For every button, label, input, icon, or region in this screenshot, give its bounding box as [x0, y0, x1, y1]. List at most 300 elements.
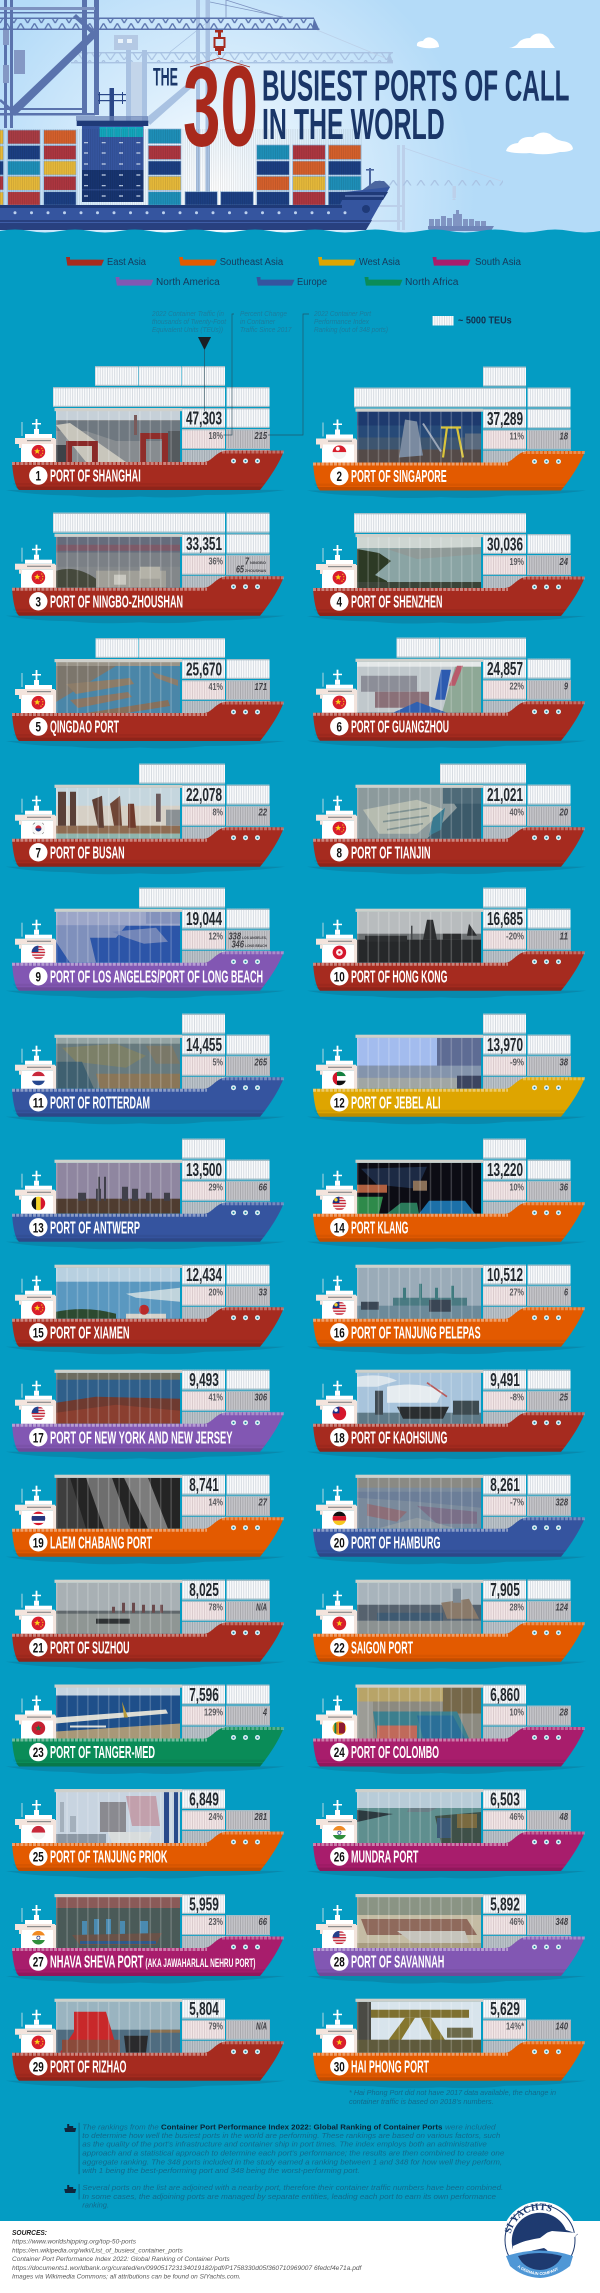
containers	[440, 764, 570, 805]
key: how to read: ~ 5000 TEUs	[458, 316, 512, 327]
ship 12: -9%	[510, 1057, 524, 1069]
port photo	[357, 1268, 481, 1319]
ship 14: 14	[334, 1219, 345, 1235]
ship 7: 22	[258, 807, 267, 819]
ship 6: 9	[564, 681, 568, 693]
ship 30: 14%*	[506, 2021, 525, 2033]
footnote: container traffic is based on 2018’s numbers.	[349, 2097, 494, 2106]
ship 16: PORT OF TANJUNG PELEPAS	[351, 1322, 481, 1342]
ship 21	[6, 1580, 285, 1669]
legend: East Asia	[107, 257, 146, 268]
sources: Images via Wikimedia Commons; all attributions can be found on SIYachts.com.	[12, 2274, 241, 2281]
title: THE	[153, 64, 178, 92]
key: how to read: Performance Index	[314, 319, 369, 326]
ship 24: 6,860	[490, 1685, 520, 1705]
ship 5: 5	[36, 719, 41, 735]
ship 26: 6,503	[490, 1790, 520, 1810]
legend: Europe	[297, 277, 327, 288]
ship 29: 79%	[208, 2021, 223, 2033]
port photo	[357, 1038, 481, 1089]
ship 30	[307, 1999, 586, 2088]
ship 9: LOS ANGELES,	[242, 935, 267, 940]
ship 29: PORT OF RIZHAO	[50, 2056, 127, 2076]
ship 15: 15	[33, 1324, 44, 1340]
note 1: as the quality of the port’s infrastructure and container ship in port times. The index employs both an administrative	[82, 2140, 487, 2149]
containers	[528, 1265, 570, 1285]
containers	[354, 366, 570, 428]
port photo	[56, 2002, 180, 2053]
port photo	[56, 536, 180, 588]
ship 9	[6, 888, 285, 998]
ship 30: 30	[334, 2058, 345, 2074]
ship 17: 9,493	[189, 1370, 219, 1390]
ship 21: N/A	[256, 1602, 267, 1614]
ship 30: 140	[556, 2021, 568, 2033]
ship 29: 29	[33, 2058, 44, 2074]
containers	[139, 888, 270, 929]
ship 22: 124	[556, 1602, 568, 1614]
port photo	[56, 1582, 180, 1634]
ship 11: 14,455	[186, 1035, 222, 1055]
key leader lines	[204, 314, 309, 435]
ship 23: 4	[262, 1706, 267, 1718]
port photo	[56, 1163, 180, 1214]
ship 28: 46%	[510, 1916, 524, 1928]
ship 9: 9	[36, 968, 41, 984]
ship 28: 5,892	[490, 1894, 520, 1914]
ship 1: 1	[36, 468, 41, 484]
ship 23	[6, 1684, 285, 1774]
ship 18	[307, 1370, 586, 1459]
ship 22	[307, 1580, 586, 1669]
ship 26: 48	[559, 1811, 568, 1823]
ship 18: 25	[559, 1392, 568, 1404]
footnote	[349, 2088, 556, 2106]
port photo	[357, 788, 481, 839]
ship 5	[6, 638, 285, 749]
ship 21: PORT OF SUZHOU	[50, 1637, 130, 1657]
ship 28: 348	[556, 1916, 568, 1928]
ship 13: PORT OF ANTWERP	[50, 1217, 140, 1237]
note 2	[64, 2183, 503, 2210]
ship 29: 5,804	[189, 1999, 219, 2019]
note 1: approach and a statistical approach to determine each port’s performance; the results are then combined to create one	[82, 2149, 504, 2158]
ship 20: 328	[556, 1497, 568, 1509]
ship 1: 215	[254, 430, 267, 442]
ship 5: QINGDAO PORT	[50, 717, 119, 737]
key: how to read: Ranking (out of 348 ports)	[314, 327, 388, 334]
ship 16: 6	[564, 1287, 568, 1299]
ship 5: 41%	[208, 681, 223, 693]
ship 14: 13,220	[487, 1160, 523, 1180]
ship 13: 13,500	[186, 1160, 222, 1180]
ship 17	[6, 1370, 285, 1459]
ship 25: PORT OF TANJUNG PRIOK	[50, 1847, 168, 1867]
note 1: with 1 being the best-performing port and 348 being the worst-performing port.	[82, 2166, 360, 2175]
ship 11: 11	[33, 1094, 44, 1110]
ship 21: 8,025	[189, 1580, 219, 1600]
ship 12	[307, 1014, 586, 1124]
ship 7: 7	[36, 844, 41, 860]
ship 12: 38	[560, 1057, 568, 1069]
ship 2: 2	[337, 468, 342, 484]
ship 19: LAEM CHABANG PORT	[50, 1532, 152, 1552]
port photo	[56, 1268, 180, 1319]
ship 9: LONG BEACH	[245, 943, 267, 948]
ship 11	[6, 1014, 285, 1124]
containers	[182, 1014, 270, 1055]
ship 4: 30,036	[487, 534, 523, 554]
ship 6	[307, 638, 586, 748]
ship 8: 8	[337, 844, 342, 860]
ship 12: PORT OF JEBEL ALI	[351, 1092, 440, 1112]
ship 22: SAIGON PORT	[351, 1637, 413, 1657]
ship 21: 78%	[208, 1602, 223, 1614]
containers	[96, 638, 270, 679]
ship 25: 24%	[208, 1811, 223, 1823]
ship 15	[6, 1265, 285, 1354]
port photo	[357, 662, 481, 713]
ship 25: 281	[254, 1811, 267, 1823]
ship 10: 16,685	[487, 909, 523, 929]
port photo	[357, 1792, 481, 1843]
port photo	[56, 788, 180, 839]
ship 3: PORT OF NINGBO-ZHOUSHAN	[50, 591, 183, 611]
ship 18: -8%	[510, 1392, 524, 1404]
ship 26: 46%	[510, 1811, 524, 1823]
containers	[483, 1139, 570, 1180]
title	[153, 44, 570, 170]
ship 9: 346	[232, 939, 244, 951]
ship 27	[6, 1894, 285, 1984]
ship 19: 19	[33, 1534, 44, 1550]
port photo	[357, 412, 481, 462]
ship 22: 7,905	[490, 1580, 520, 1600]
hull	[0, 187, 390, 230]
key: how to read: Traffic Since 2017	[240, 327, 293, 334]
ship 29: N/A	[256, 2021, 267, 2033]
port photo	[357, 1372, 481, 1424]
footer panel	[0, 2221, 600, 2293]
ship 24: PORT OF COLOMBO	[351, 1742, 439, 1762]
ship 2: 18	[560, 430, 568, 442]
ship 6: 6	[337, 718, 342, 734]
legend: North America	[156, 277, 220, 288]
ship 24: 24	[334, 1744, 345, 1760]
ship 17: 306	[254, 1392, 267, 1404]
legend	[66, 257, 521, 288]
legend: South Asia	[475, 257, 521, 268]
ship 14: 10%	[510, 1182, 524, 1194]
stacked containers	[0, 129, 361, 205]
ship 8: PORT OF TIANJIN	[351, 842, 431, 862]
ship 2: 37,289	[487, 409, 523, 429]
ship 26: MUNDRA PORT	[351, 1847, 419, 1867]
note 2: In some cases, the adjoining ports are managed by separate entities, leading each port to earn its own performance	[82, 2192, 496, 2201]
key: how to read: 2022 Container Traffic (in	[151, 311, 224, 318]
ship 16: 27%	[510, 1287, 524, 1299]
ship 6: 22%	[510, 681, 524, 693]
port photo	[357, 1897, 481, 1948]
ship 8	[307, 764, 586, 874]
ship 18: PORT OF KAOHSIUNG	[351, 1427, 447, 1447]
ship 23: PORT OF TANGER-MED	[50, 1742, 155, 1762]
ship 21: 21	[33, 1639, 44, 1655]
ship 4: 19%	[510, 556, 524, 568]
note 1: aggregate ranking. The 348 ports included in the study earned a ranking between 1 and 348 for how well they perform,	[82, 2157, 502, 2166]
containers	[396, 638, 570, 679]
ship 27: 5,959	[189, 1894, 219, 1914]
header illustration	[0, 0, 600, 240]
note 1: to determine how well the busiest ports in the world are performing. These rankings are based on various factors, such	[82, 2131, 500, 2140]
ship 8: 21,021	[487, 785, 523, 805]
ship 20	[307, 1475, 586, 1564]
ship 4	[307, 513, 586, 624]
note 1: The rankings from the	[82, 2122, 159, 2131]
ship 18: 9,491	[490, 1370, 520, 1390]
containers	[528, 1370, 570, 1390]
ship 24	[307, 1684, 586, 1774]
logo	[504, 2202, 578, 2278]
ship 8: 20	[559, 807, 568, 819]
sea wave	[0, 230, 600, 240]
ship 28: 28	[334, 1954, 345, 1970]
ship 9: 338	[228, 931, 241, 943]
sources: Container Port Performance Index 2022: Global Ranking of Container Ports	[12, 2256, 230, 2263]
background crane	[71, 0, 393, 192]
legend: Southeast Asia	[220, 257, 284, 268]
ship 23: 129%	[204, 1706, 223, 1718]
ship 16	[307, 1265, 586, 1354]
ship 11: PORT OF ROTTERDAM	[50, 1092, 150, 1112]
ship 7: 8%	[212, 807, 223, 819]
containers	[528, 1475, 570, 1495]
ship 13: 29%	[208, 1182, 223, 1194]
key: how to read: thousands of Twenty-Foot	[152, 319, 227, 326]
ship 17: 41%	[208, 1392, 223, 1404]
port photo	[357, 2002, 481, 2053]
ship 14	[307, 1139, 586, 1249]
ship 2: PORT OF SINGAPORE	[351, 466, 447, 486]
container ship	[0, 88, 390, 230]
port photo	[56, 1373, 180, 1424]
containers	[226, 1475, 270, 1495]
ship 6: PORT OF GUANGZHOU	[351, 716, 449, 736]
note 2: Several ports on the list are adjoined with a nearby port, therefore their container traffic numbers have been combined.	[82, 2183, 503, 2192]
ship 10	[307, 888, 586, 998]
ship 16: 16	[334, 1324, 345, 1340]
port photo	[357, 1478, 481, 1529]
clouds	[417, 34, 573, 154]
ship 7	[6, 764, 285, 874]
ship 28: PORT OF SAVANNAH	[351, 1952, 444, 1972]
key: how to read: 2022 Container Port	[313, 311, 372, 318]
ship 12: 12	[334, 1094, 345, 1110]
containers	[483, 1014, 570, 1055]
ship 9: 19,044	[186, 909, 222, 929]
port photo	[357, 537, 481, 588]
ship 14: 36	[560, 1182, 568, 1194]
note 1	[64, 2122, 504, 2175]
ship 6: 24,857	[487, 659, 523, 679]
ship 4: PORT OF SHENZHEN	[351, 592, 442, 612]
hoist	[190, 30, 250, 67]
ship 10: -20%	[506, 931, 524, 943]
ship 1: PORT OF SHANGHAI	[50, 466, 141, 486]
containers	[226, 1580, 270, 1600]
ship 7: PORT OF BUSAN	[50, 842, 125, 862]
logo: A GERMAIN COMPANY	[517, 2265, 558, 2275]
ship 23: 23	[33, 1744, 44, 1760]
containers	[528, 1580, 570, 1600]
sources: https://en.wikipedia.org/wiki/List_of_busiest_container_ports	[12, 2247, 183, 2254]
ship 1: 47,303	[186, 408, 222, 428]
note 2: ranking.	[82, 2201, 109, 2210]
footnote: * Hai Phong Port did not have 2017 data available, the change in	[349, 2088, 556, 2097]
ship 19: 14%	[208, 1497, 223, 1509]
ship 26	[307, 1789, 586, 1879]
ship 15: 12,434	[186, 1265, 222, 1285]
ship 20: -7%	[510, 1497, 524, 1509]
sources: https://www.worldshipping.org/top-50-ports	[12, 2239, 137, 2246]
ship 19: 27	[258, 1497, 268, 1509]
ship 27: 23%	[208, 1916, 223, 1928]
ship 27: 66	[258, 1916, 267, 1928]
note 1: were included	[445, 2122, 497, 2131]
containers	[139, 764, 270, 805]
ship 11: 265	[254, 1057, 267, 1069]
ship 3: 3	[36, 593, 41, 609]
ship 1: 18%	[208, 430, 223, 442]
ship 10: 10	[334, 968, 345, 984]
port photo	[357, 912, 481, 963]
ship 9: 12%	[208, 931, 223, 943]
containers	[182, 1139, 270, 1180]
ship 10: 11	[560, 931, 568, 943]
ship 19	[6, 1475, 285, 1564]
containers	[483, 888, 570, 929]
far crane	[368, 145, 503, 230]
key: how to read: Percent Change	[240, 311, 287, 318]
sources: SOURCES:	[12, 2230, 47, 2237]
bridge	[77, 121, 148, 202]
ship 13: 66	[258, 1182, 267, 1194]
port photo	[56, 1038, 180, 1089]
distant ship	[428, 210, 494, 231]
ship 13	[6, 1139, 285, 1249]
ship 30: HAI PHONG PORT	[351, 2056, 429, 2076]
logo: SI YACHTS	[504, 2203, 552, 2234]
legend: North Africa	[405, 277, 459, 288]
ship 10: PORT OF HONG KONG	[351, 966, 447, 986]
ship 5: 25,670	[186, 660, 222, 680]
port name with aside: (AKA JAWAHARLAL NEHRU PORT)	[145, 1958, 255, 1970]
ship 25	[6, 1789, 285, 1879]
containers	[53, 513, 270, 554]
ship 9: PORT OF LOS ANGELES/PORT OF LONG BEACH	[50, 966, 263, 986]
ship 1	[6, 366, 285, 498]
ship 15: PORT OF XIAMEN	[50, 1322, 130, 1342]
ship 17: PORT OF NEW YORK AND NEW JERSEY	[50, 1427, 233, 1447]
port photo	[56, 1897, 180, 1948]
port photo	[56, 1688, 180, 1738]
ship 13: 13	[33, 1219, 44, 1235]
ship 3: 7	[245, 556, 250, 568]
sources	[12, 2230, 362, 2281]
ship 20: 20	[334, 1534, 345, 1550]
sources: https://documents1.worldbank.org/curated/en/099051723134019182/pdf/P1758330d05f360710969007 6fedcf4e71a.pdf	[12, 2265, 362, 2272]
ship 3	[6, 513, 285, 623]
ship 30: 5,629	[490, 1999, 520, 2019]
ship 4: 24	[559, 556, 568, 568]
ship 4: 4	[337, 594, 342, 610]
key: how to read: Equivalent Units (TEUs))	[152, 327, 223, 334]
ship 11: 5%	[212, 1057, 223, 1069]
ship 25: 25	[33, 1849, 44, 1865]
port name with aside: NHAVA SHEVA PORT	[50, 1952, 144, 1972]
ship 14: PORT KLANG	[351, 1217, 408, 1237]
port photo	[56, 912, 180, 963]
ship 15: 20%	[208, 1287, 223, 1299]
ship 20: PORT OF HAMBURG	[351, 1532, 440, 1552]
title: IN THE WORLD	[262, 100, 445, 149]
ship 24: 10%	[510, 1706, 524, 1718]
funnel and antennas	[76, 88, 148, 121]
containers	[226, 1265, 270, 1285]
ship 2: 11%	[510, 430, 524, 442]
ship 3: NINGBO	[250, 560, 266, 565]
ship 24: 28	[559, 1706, 568, 1718]
ship 8: 40%	[510, 807, 524, 819]
containers	[53, 366, 270, 428]
ship 17: 17	[33, 1429, 44, 1445]
port photo	[357, 1688, 481, 1738]
ship 22: 28%	[510, 1602, 524, 1614]
key: how to read	[151, 311, 512, 350]
foreground crane	[0, 0, 320, 128]
ship 5: 171	[254, 681, 267, 693]
ship 12: 13,970	[487, 1035, 523, 1055]
port photo	[56, 662, 180, 713]
containers	[226, 1370, 270, 1390]
containers	[226, 1684, 270, 1704]
ship 18: 18	[334, 1429, 345, 1445]
ship 3: 36%	[208, 556, 223, 568]
bow mast	[361, 168, 390, 195]
ship 25: 6,849	[189, 1790, 219, 1810]
ship 29	[6, 1999, 285, 2088]
port photo	[56, 411, 180, 462]
ship 23: 7,596	[189, 1685, 219, 1705]
ship 16: 10,512	[487, 1265, 523, 1285]
ship 3: 65	[236, 563, 244, 575]
note 1: Container Port Performance Index 2022: Global Ranking of Container Ports	[161, 2122, 442, 2131]
ship 26: 26	[334, 1849, 345, 1865]
port photo	[357, 1582, 481, 1634]
ship 22: 22	[334, 1639, 345, 1655]
ship 7: 22,078	[186, 785, 222, 805]
ship 28	[307, 1894, 586, 1984]
key: how to read: in Container	[240, 319, 276, 326]
port photo	[56, 1478, 180, 1529]
port photo	[357, 1162, 481, 1214]
ship 2	[307, 366, 586, 498]
ship 27: 27	[33, 1954, 44, 1970]
ship 19: 8,741	[189, 1475, 219, 1495]
legend: West Asia	[359, 257, 400, 268]
ship 20: 8,261	[490, 1475, 520, 1495]
port photo	[56, 1792, 180, 1843]
